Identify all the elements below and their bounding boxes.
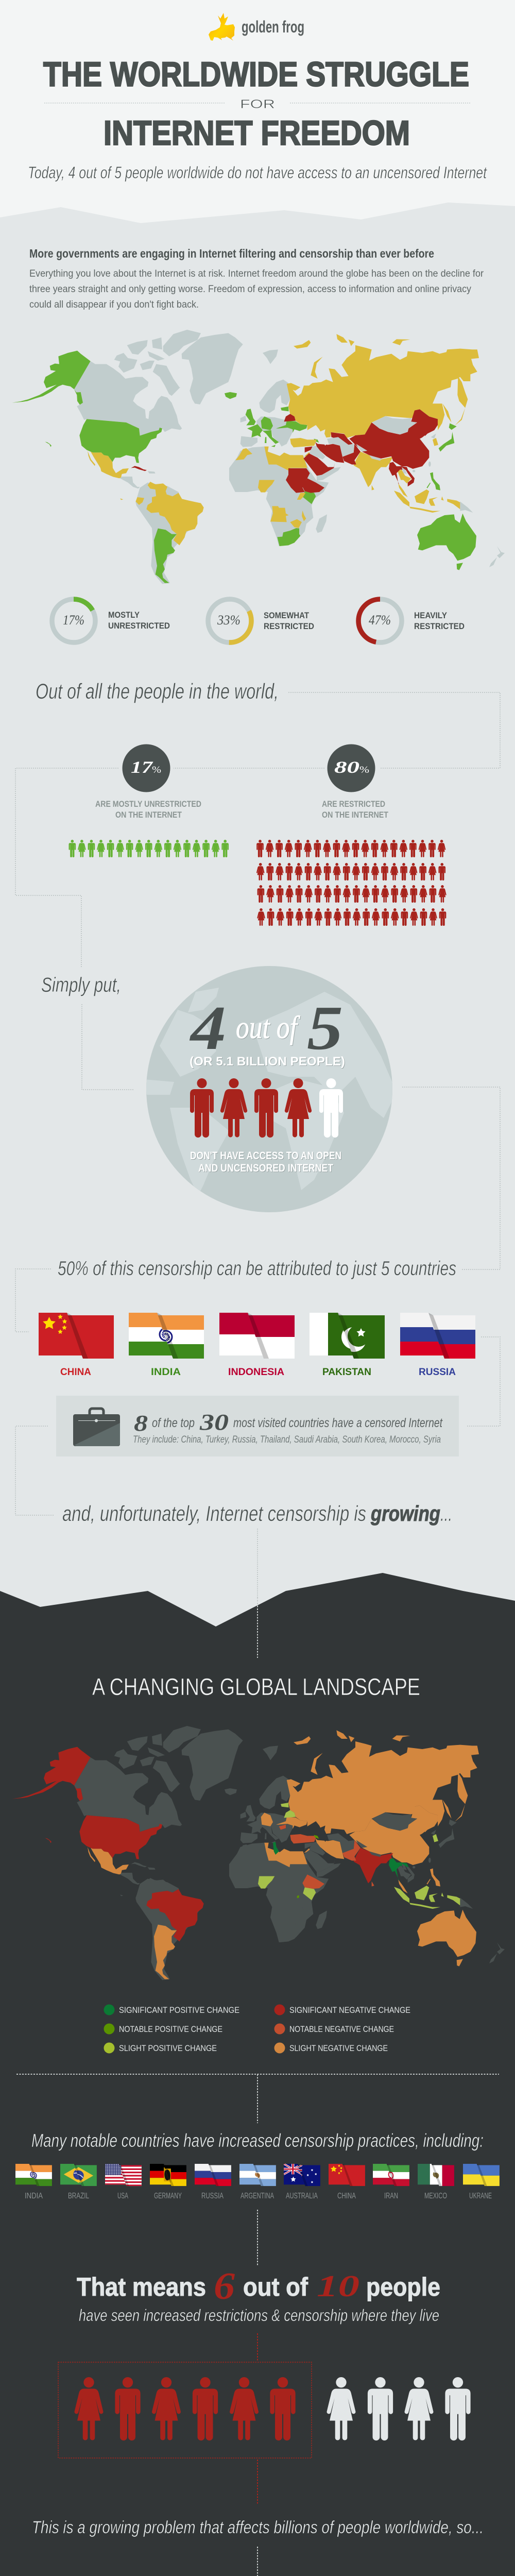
- badge: 17 percent: 17: [131, 758, 153, 777]
- badge: 80 percent: [328, 744, 375, 792]
- panel: governments censorship intro: [29, 247, 484, 310]
- flag: Pakistan: PAKISTAN: [322, 1367, 371, 1378]
- heading with numbers: 6: [214, 2265, 235, 2308]
- text: simply put: Simply put,: [41, 974, 121, 996]
- donut: 17 percent: MOSTLY: [108, 610, 140, 620]
- legend item: SIGNIFICANT NEGATIVE CHANGE: [289, 2005, 410, 2015]
- number 8: 8: [134, 1411, 148, 1436]
- badge: 17 percent: [123, 744, 170, 792]
- flag: Australia: [284, 2164, 320, 2200]
- callout box: six people: [58, 2362, 312, 2458]
- caption: restricted: ARE RESTRICTED: [322, 799, 385, 809]
- panel: 6 out of 10: [32, 2265, 484, 2537]
- chart: world map of changes: [12, 1726, 505, 1980]
- pictogram: 17 green people: [68, 840, 229, 857]
- callout: top visited countries: [56, 1396, 459, 1456]
- caption: billion people: (OR 5.1 BILLION PEOPLE): [190, 1055, 345, 1069]
- flag: Russia: [400, 1313, 475, 1378]
- donut: 33 percent: SOMEWHAT: [264, 611, 310, 620]
- flag: Russia: [195, 2164, 231, 2200]
- pictogram: ten people: [75, 2377, 471, 2441]
- caption: access: AND UNCENSORED INTERNET: [198, 1162, 333, 1174]
- title connector word: FOR: [240, 97, 275, 111]
- text block: [29, 268, 484, 310]
- legend item: NOTABLE POSITIVE CHANGE: [119, 2024, 222, 2034]
- chart: world map of internet restriction: [12, 330, 505, 584]
- badge: 80 percent: %: [359, 765, 369, 775]
- legend item: SLIGHT NEGATIVE CHANGE: [289, 2043, 388, 2053]
- pictogram: 80 red people: [256, 840, 447, 926]
- flag: Brazil: BRAZIL: [68, 2192, 89, 2200]
- text: censorship is growing: ...: [440, 1501, 452, 1526]
- caption: restricted: [322, 799, 389, 820]
- number 30: 30: [199, 1410, 229, 1435]
- heading with numbers: out of: [243, 2273, 308, 2301]
- flag: Mexico: MEXICO: [424, 2192, 447, 2200]
- legend item: [104, 2042, 217, 2054]
- heading with numbers: That means: [77, 2273, 206, 2301]
- flag: China: CHINA: [337, 2192, 356, 2200]
- caption: access: [190, 1150, 341, 1174]
- flag: China: [39, 1313, 114, 1378]
- donut: 47 percent: RESTRICTED: [414, 621, 465, 631]
- donut: 17 percent: [52, 599, 170, 642]
- big number 5: 5: [307, 993, 343, 1063]
- script: out of: out of: [236, 1010, 300, 1045]
- icon: golden frog logo: [209, 13, 304, 41]
- heading with numbers: 10: [317, 2269, 359, 2303]
- panel: notable countries: [15, 2130, 500, 2200]
- legend item: SLIGHT POSITIVE CHANGE: [119, 2043, 217, 2053]
- caption: access: DON'T HAVE ACCESS TO AN OPEN: [190, 1150, 341, 1162]
- donut: 33 percent: [208, 599, 314, 642]
- text block: three years straight and only getting worse. Freedom of expression, access to information and online privacy: [29, 283, 471, 295]
- flag: India: INDIA: [151, 1367, 181, 1378]
- pictogram: five large people: [190, 1078, 343, 1138]
- text: of the top: [152, 1416, 195, 1430]
- flag: India: [15, 2164, 52, 2200]
- flag: China: CHINA: [60, 1367, 91, 1378]
- caption: restricted: ON THE INTERNET: [322, 810, 389, 820]
- big number 4: 4: [190, 993, 226, 1063]
- flag: Iran: [373, 2164, 409, 2200]
- title line 2: INTERNET FREEDOM: [104, 114, 410, 152]
- caption: unrestricted: [95, 799, 201, 820]
- donut: 33 percent: 33%: [217, 613, 241, 628]
- text block: could all disappear if you don't fight back.: [29, 299, 199, 310]
- heading: Out of all the people in the world,: [36, 679, 279, 703]
- legend item: [274, 2042, 388, 2054]
- flag: Pakistan: [310, 1313, 385, 1378]
- flag: Russia: RUSSIA: [419, 1367, 456, 1378]
- heading with numbers: [77, 2265, 440, 2308]
- caption: unrestricted: ON THE INTERNET: [115, 810, 182, 820]
- flag: India: INDIA: [25, 2192, 43, 2200]
- legend item: [104, 2024, 222, 2034]
- flag: China: [329, 2164, 365, 2200]
- dark section background: [0, 1573, 515, 2576]
- heading: changing global landscape: A CHANGING GLOBAL LANDSCAPE: [92, 1673, 420, 1700]
- caption: unrestricted: ARE MOSTLY UNRESTRICTED: [95, 799, 201, 809]
- badge: 17 percent: %: [152, 765, 161, 775]
- flag: Ukraine: UKRANE: [469, 2192, 492, 2200]
- text: censorship is growing: and, unfortunately, Internet censorship is: [62, 1501, 366, 1526]
- icon: suitcase: [73, 1409, 120, 1446]
- header panel: [28, 13, 487, 182]
- flag: Indonesia: [219, 1313, 295, 1378]
- flag: India: [129, 1313, 204, 1378]
- flag: Iran: IRAN: [384, 2192, 398, 2200]
- donut: 17 percent: 17%: [63, 613, 84, 628]
- donut: 47 percent: HEAVILY: [414, 611, 448, 620]
- heading: More governments are engaging in Internet filtering and censorship than ever before: [29, 247, 434, 260]
- flag: Argentina: ARGENTINA: [241, 2192, 274, 2200]
- badge: 80 percent: 80: [334, 758, 359, 777]
- flag: Australia: AUSTRALIA: [286, 2192, 318, 2200]
- flag: Germany: GERMANY: [154, 2192, 182, 2200]
- text: censorship is growing: growing: [370, 1501, 440, 1526]
- flag: Germany: [150, 2164, 186, 2200]
- donut: 47 percent: 47%: [369, 613, 391, 628]
- flag: Russia: RUSSIA: [201, 2192, 224, 2200]
- legend item: NOTABLE NEGATIVE CHANGE: [289, 2024, 394, 2034]
- text: most visited countries have a censored Internet: [233, 1416, 443, 1430]
- illustration: globe with 4 out of 5: [144, 966, 397, 1212]
- panel: five countries: [39, 1258, 475, 1378]
- legend: [104, 2004, 410, 2054]
- flag: USA: USA: [117, 2192, 128, 2200]
- legend item: [274, 2024, 394, 2034]
- flag: Indonesia: INDONESIA: [228, 1367, 284, 1378]
- donut legend: [52, 599, 465, 642]
- flag: Ukraine: [463, 2164, 500, 2200]
- heading with numbers: people: [366, 2273, 440, 2301]
- icon: golden frog logo: golden frog: [242, 18, 304, 36]
- text block: Everything you love about the Internet is at risk. Internet freedom around the globe has been on the decline for: [29, 268, 484, 279]
- flag: Brazil: [60, 2164, 97, 2200]
- flag: Argentina: [239, 2164, 276, 2200]
- donut: 47 percent: [358, 599, 465, 642]
- list of countries: They include: China, Turkey, Russia, Thailand, Saudi Arabia, South Korea, Morocco, Syria: [133, 1434, 441, 1445]
- flag: USA: [105, 2164, 142, 2200]
- donut: 17 percent: UNRESTRICTED: [108, 621, 170, 631]
- flag: Mexico: [418, 2164, 454, 2200]
- panel: out of all people: [36, 679, 447, 926]
- donut: 33 percent: RESTRICTED: [264, 621, 314, 631]
- legend item: SIGNIFICANT POSITIVE CHANGE: [119, 2005, 239, 2015]
